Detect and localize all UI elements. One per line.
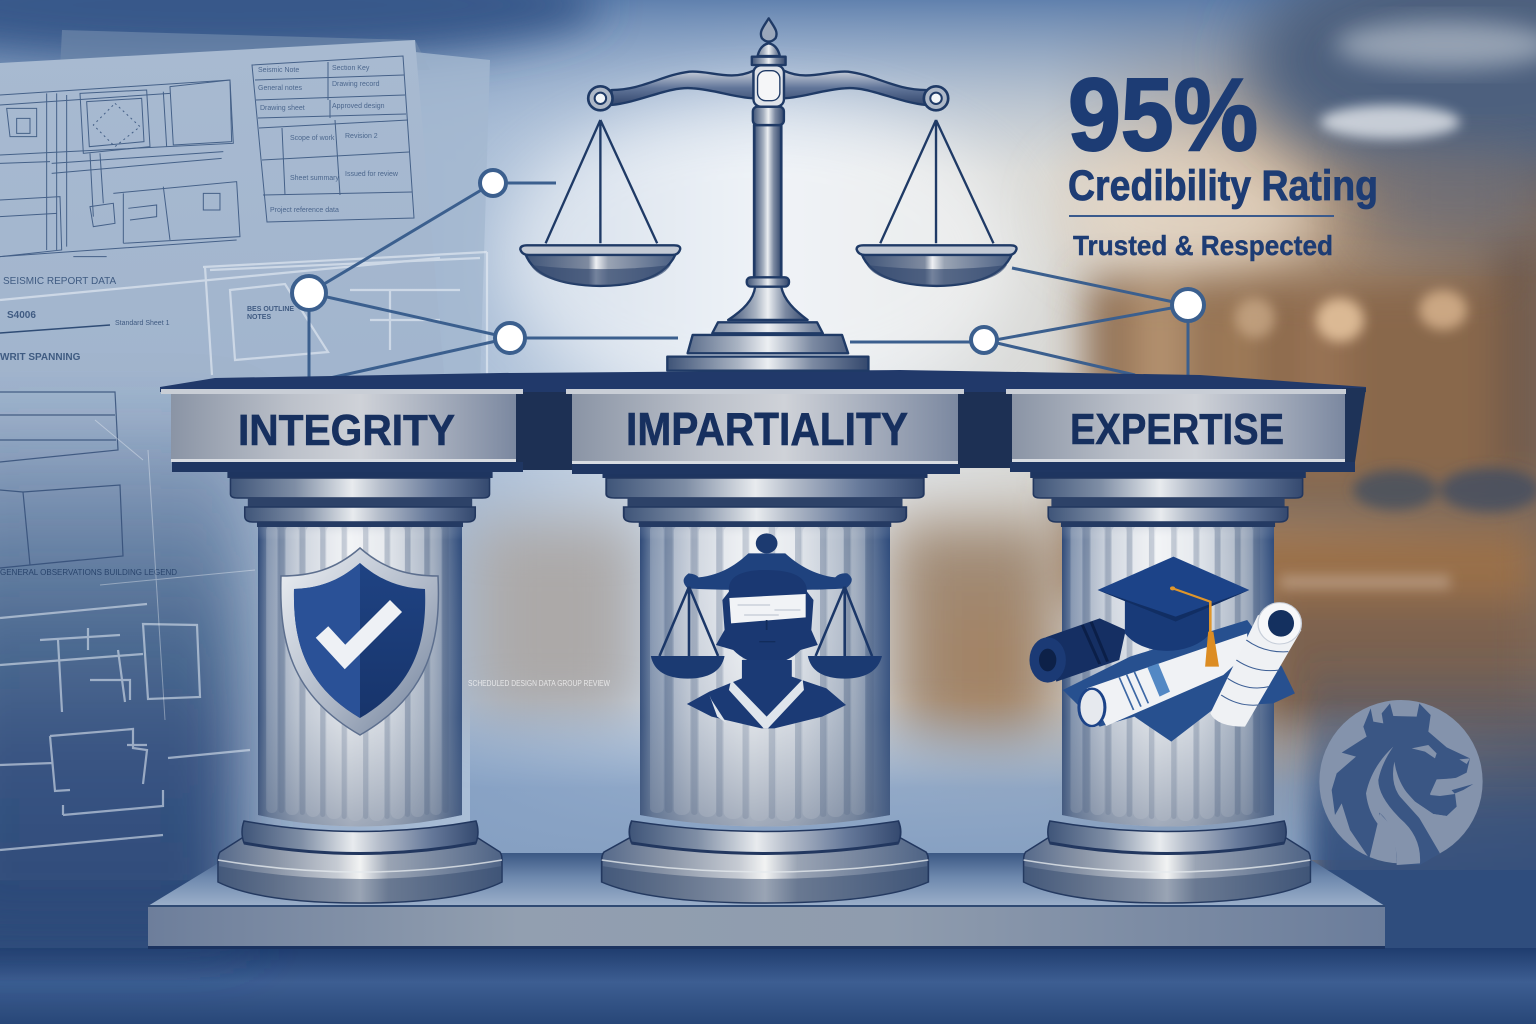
blueprints: SCHEDULED DESIGN DATA GROUP REVIEW — [468, 679, 610, 688]
lower plans — [0, 604, 250, 850]
white plan lines — [0, 252, 487, 385]
label: integrity: INTEGRITY — [238, 406, 455, 455]
blueprints: NOTES — [247, 314, 271, 321]
diploma roll — [1079, 633, 1247, 726]
right scale pan — [857, 120, 1017, 286]
blueprints: Revision 2 — [345, 133, 378, 140]
label: expertise: EXPERTISE — [1070, 405, 1284, 454]
entablature — [160, 370, 1366, 474]
pillar: expertise — [1024, 466, 1310, 903]
stat number: 95% — [1068, 57, 1258, 172]
blueprints: S4006 — [7, 310, 36, 321]
platform — [148, 853, 1385, 949]
blueprints: BES OUTLINE — [247, 306, 294, 313]
blueprints: Project reference data — [270, 207, 339, 214]
floor plan sheet — [0, 80, 240, 257]
stat sub-label: Trusted & Respected — [1073, 230, 1333, 261]
blueprints: WRIT SPANNING — [0, 352, 81, 363]
blueprints: Seismic Note — [258, 67, 299, 74]
blueprints: GENERAL OBSERVATIONS BUILDING LEGEND — [0, 568, 177, 577]
stat label: Credibility Rating — [1068, 162, 1378, 210]
blueprints: Sheet summary — [290, 175, 340, 182]
blueprints: Issued for review — [345, 171, 399, 178]
blurred courtroom — [1060, 240, 1536, 730]
title block table — [252, 56, 414, 222]
scales of justice — [520, 18, 1017, 371]
label: integrity — [161, 389, 523, 462]
blueprints: Section Key — [332, 65, 370, 72]
label: expertise — [1006, 389, 1346, 462]
beam — [612, 71, 926, 105]
connector network — [309, 183, 1188, 378]
blueprints: Drawing sheet — [260, 105, 305, 112]
pillar: integrity — [218, 466, 502, 903]
icon: graduation cap and scrolls — [1029, 557, 1301, 742]
stat callout: 95% credibility rating — [1068, 57, 1378, 261]
icon: blindfolded justice with scales — [651, 533, 882, 728]
blueprints: SEISMIC REPORT DATA — [3, 276, 116, 287]
blueprints: Standard Sheet 1 — [115, 320, 170, 327]
top-right dark sky — [1250, 0, 1536, 180]
left scale pan — [520, 120, 680, 286]
blueprints: Scope of work — [290, 135, 335, 142]
blueprints: Approved design — [332, 103, 385, 110]
blueprints — [0, 0, 610, 940]
gown — [1063, 620, 1295, 742]
connector nodes — [292, 170, 1204, 353]
blueprints: Drawing record — [332, 81, 380, 88]
floor — [0, 948, 1536, 1024]
label: impartiality — [566, 389, 964, 464]
telescope scroll — [1029, 618, 1126, 683]
logo: lion emblem — [1319, 700, 1483, 865]
base and pole — [667, 322, 868, 371]
pillar: impartiality — [602, 466, 928, 903]
label: impartiality: IMPARTIALITY — [626, 403, 908, 455]
upright scroll — [1210, 603, 1301, 727]
blueprints: General notes — [258, 85, 302, 92]
icon: shield with check — [281, 548, 438, 735]
